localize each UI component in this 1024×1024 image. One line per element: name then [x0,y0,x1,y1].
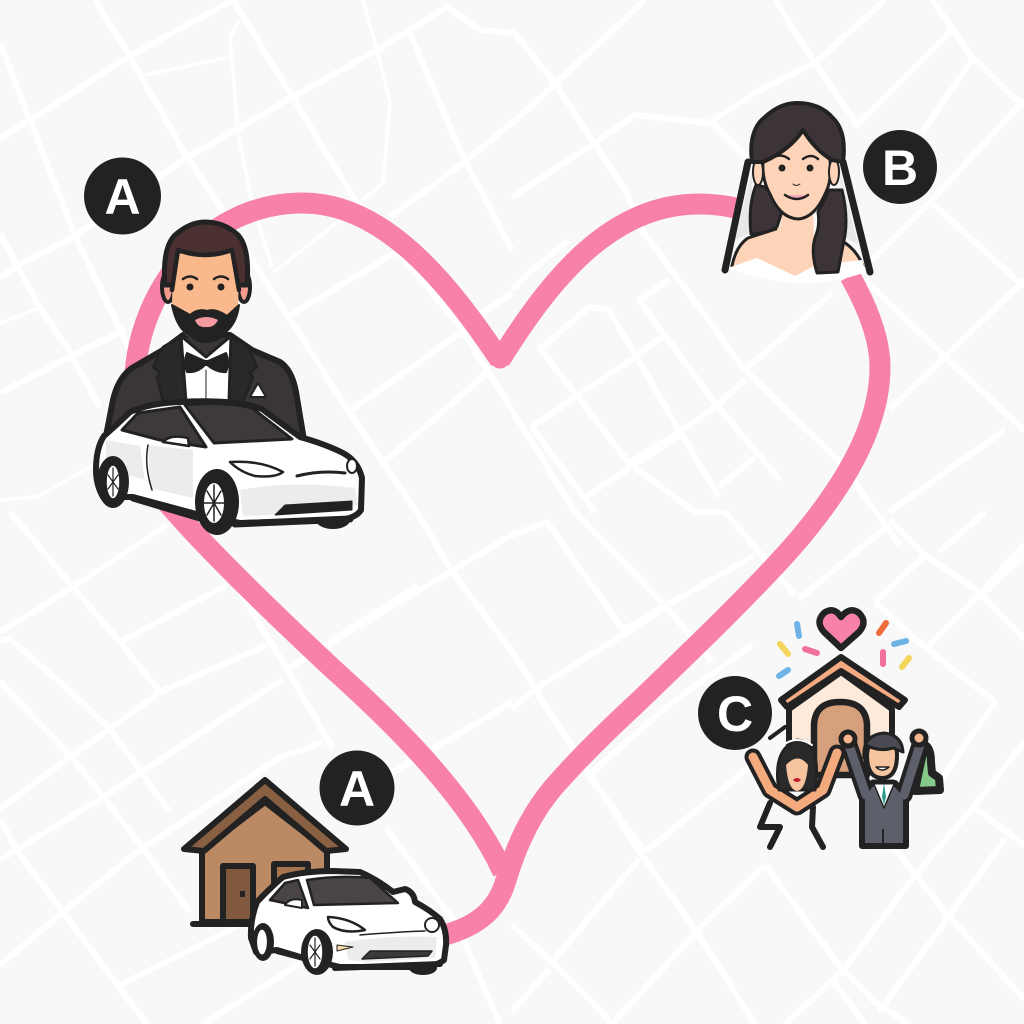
mirror [285,899,302,908]
pocket square [250,383,266,397]
shoulders and neck [730,208,815,276]
windshield [307,877,398,905]
tuxedo jacket [106,335,304,440]
bow tie [185,353,228,372]
house wall [202,802,327,922]
green bush [915,745,940,791]
house door [223,866,253,922]
grille [275,501,352,515]
grille [362,951,432,959]
front bumper shade [240,484,358,516]
mirror [163,437,189,446]
car top [96,401,362,535]
badge A bottom [320,750,394,826]
underbody [277,951,440,968]
arms outline [849,745,920,795]
eyes [186,284,194,290]
door arch [814,702,867,775]
house [184,780,346,924]
celebrating bride [753,740,837,847]
hair side [813,190,846,273]
veil panels [735,170,858,245]
house window [274,864,308,922]
car body [96,401,362,523]
bride portrait [725,103,870,283]
groom hands [841,732,855,746]
small front wheel [409,961,437,975]
heart [820,610,864,648]
beard [172,305,239,342]
groom figure [106,222,304,440]
roof [781,657,905,707]
side window [270,880,308,908]
lapels [153,337,186,402]
shirt [181,336,231,402]
groom head [867,738,897,778]
badge C: C [717,686,753,742]
badge C [698,676,772,750]
small front wheel [316,511,350,529]
ears [162,272,174,302]
ears [753,159,763,185]
badge A bottom: A [339,761,375,817]
groom shirt [873,782,895,808]
badge A top [84,158,161,234]
dress [728,258,866,283]
windshield [185,404,292,443]
badge B: B [882,140,918,196]
door gray panels [148,445,193,498]
badge A top: A [104,169,141,225]
underbody [133,498,350,524]
house roof [184,780,346,851]
heart route line [135,203,880,935]
celebrating groom [841,731,926,846]
veil edges [725,162,870,272]
walls [789,672,892,770]
suit [862,783,906,846]
hair [164,222,248,285]
car body [251,871,446,967]
wheels [301,929,333,975]
car bottom [251,871,446,975]
headlights [328,917,365,931]
confetti [779,623,909,676]
bumper shade [345,937,437,962]
hair back [750,185,783,234]
hair top [751,103,844,162]
face [763,130,830,219]
face [172,250,238,342]
side window [122,407,206,447]
headlight [230,462,283,476]
facial features [778,164,786,172]
badge B [863,130,937,204]
wedding chapel [770,610,909,775]
wheels [195,469,239,535]
